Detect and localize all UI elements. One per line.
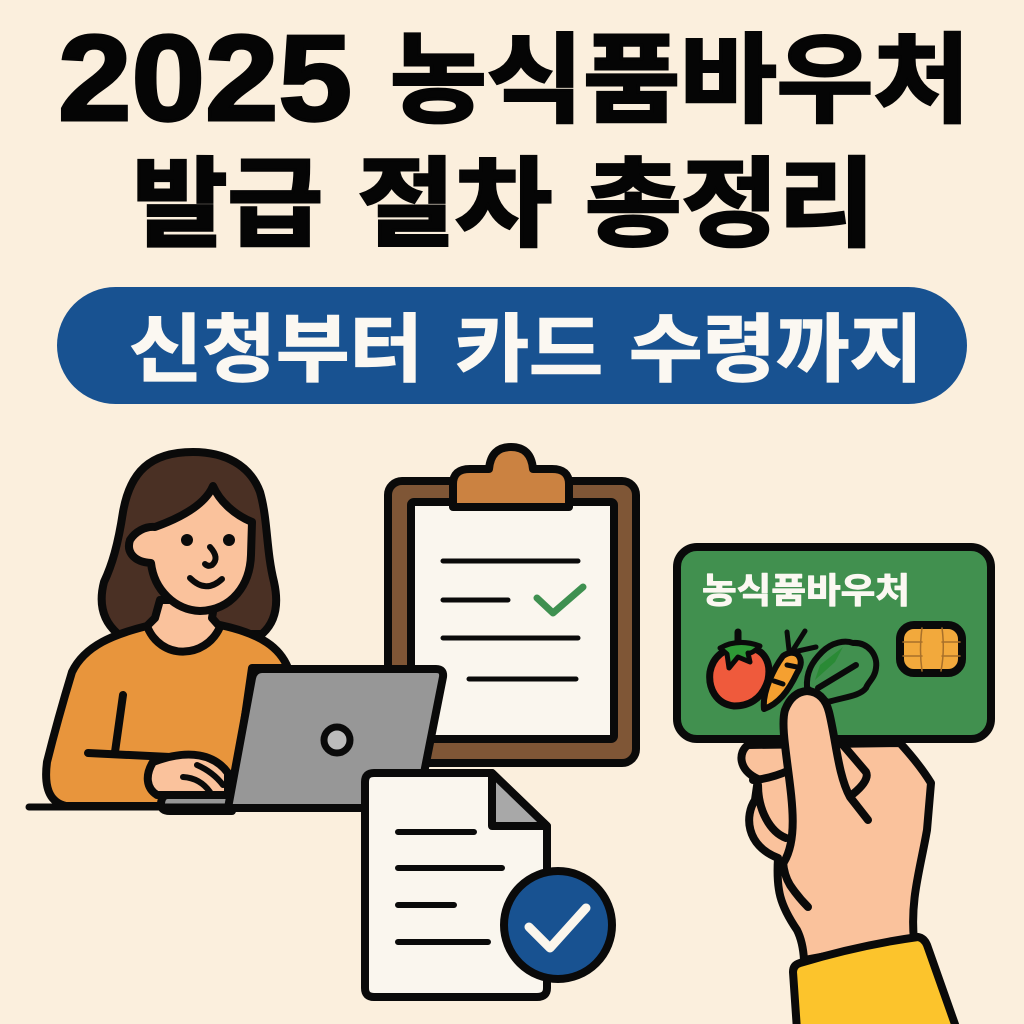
card label: 농식품바우처 xyxy=(702,572,910,611)
hand holding card xyxy=(741,691,957,1024)
icon: blue check badge xyxy=(504,871,612,979)
title: 발급 xyxy=(132,150,323,259)
clipboard illustration xyxy=(388,447,636,763)
thumb xyxy=(784,691,850,860)
palm and fingers xyxy=(741,743,931,960)
voucher card xyxy=(677,547,991,739)
title: 2025 xyxy=(58,10,352,146)
sweater xyxy=(46,625,288,806)
keyboard base xyxy=(161,795,232,811)
neck xyxy=(147,600,220,652)
hand xyxy=(148,755,228,795)
title: 총정리 xyxy=(585,150,875,259)
subtitle pill: 신청부터 xyxy=(129,308,423,391)
hair xyxy=(102,452,276,634)
subtitle pill: 카드 xyxy=(455,308,603,391)
title: 농식품바우처 xyxy=(390,26,970,135)
desk line xyxy=(29,804,230,810)
icon: tomato xyxy=(710,632,769,706)
icon: spinach xyxy=(807,642,876,702)
icon: card chip xyxy=(900,625,962,673)
title xyxy=(58,10,970,259)
laptop xyxy=(228,669,443,808)
icon: green check xyxy=(537,587,583,613)
finger lines xyxy=(753,745,867,907)
person with laptop xyxy=(46,452,443,811)
icon: carrot xyxy=(764,631,816,709)
subtitle pill: 수령까지 xyxy=(629,308,923,391)
face details xyxy=(181,534,235,586)
document with check badge xyxy=(365,773,612,997)
face xyxy=(129,486,252,611)
title: 절차 xyxy=(358,150,552,259)
yellow sleeve xyxy=(793,937,957,1024)
subtitle pill xyxy=(57,287,967,404)
